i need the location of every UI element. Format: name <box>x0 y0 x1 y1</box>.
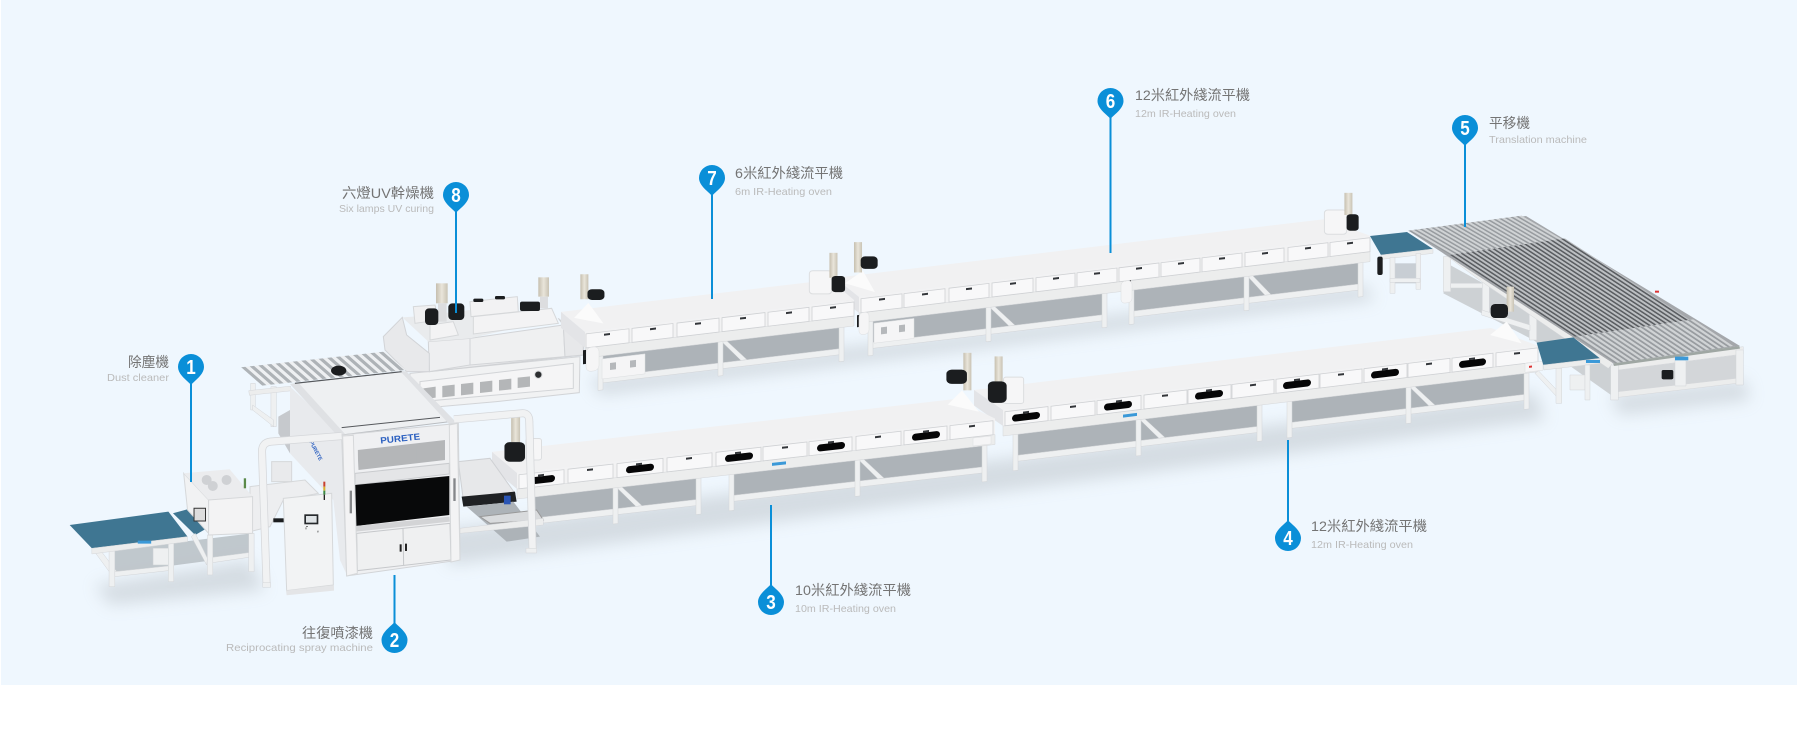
pin 4 <box>1275 440 1301 551</box>
callout 5: translation machine <box>1452 115 1587 227</box>
sublabel: Translation machine <box>1489 134 1587 146</box>
callout 3: 10m oven <box>758 505 911 615</box>
pipe arches <box>262 436 342 587</box>
pin 8: 8 <box>451 185 461 207</box>
callout 7: 6m oven <box>699 165 843 299</box>
callout 1: dust cleaner <box>107 354 204 482</box>
pin 4: 4 <box>1283 528 1293 550</box>
exhaust fans on upper ovens <box>574 242 878 324</box>
transfer table right <box>458 458 543 542</box>
label: 10米紅外綫流平機 <box>795 582 911 598</box>
callout 2: spray machine <box>226 575 408 654</box>
label: 6米紅外綫流平機 <box>735 165 843 181</box>
table bed <box>1408 216 1740 363</box>
dust cleaner <box>184 469 253 535</box>
sublabel: 10m IR-Heating oven <box>795 603 896 615</box>
pin 7: 7 <box>707 168 717 190</box>
label: 往復噴漆機 <box>302 625 373 641</box>
machine: translation roller table <box>1408 216 1743 400</box>
pin 2 <box>382 575 408 653</box>
label: 12米紅外綫流平機 <box>1311 518 1427 534</box>
side logo: PURETE <box>308 440 323 462</box>
sublabel: 6m IR-Heating oven <box>735 186 832 198</box>
label: 平移機 <box>1489 115 1530 131</box>
machine: reciprocating spray booth <box>262 371 543 595</box>
control cabinet <box>283 482 334 595</box>
sublabel: Six lamps UV curing <box>339 203 434 215</box>
drawers <box>519 421 993 489</box>
machine: 6m IR-heating oven <box>561 277 854 395</box>
pin 7 <box>699 165 725 299</box>
sublabel: Dust cleaner <box>107 372 170 384</box>
drawers <box>861 238 1370 313</box>
callout 4: 12m oven lower <box>1275 440 1427 551</box>
machine: 12m IR-heating oven lower <box>974 322 1543 475</box>
label: 除塵機 <box>128 354 169 370</box>
cabinet doors <box>357 523 451 571</box>
conveyor: blue upper <box>1370 232 1433 293</box>
pin 1: 1 <box>186 357 196 379</box>
callout 8: UV curing <box>339 182 469 313</box>
exhaust fans on lower ovens <box>504 353 1024 462</box>
pin 2: 2 <box>390 630 399 652</box>
table between dust cleaner and spray booth <box>250 462 318 532</box>
pin 6: 6 <box>1106 91 1115 113</box>
pin 6 <box>1098 88 1124 253</box>
drawers <box>586 302 854 348</box>
grilles <box>423 376 530 399</box>
machine: 12m IR-heating oven upper <box>835 214 1370 360</box>
machine: 10m IR-heating oven <box>492 395 995 538</box>
grille <box>358 440 445 470</box>
conveyor: blue infeed <box>70 469 254 587</box>
pin 5: 5 <box>1460 118 1470 140</box>
rollers: middle zone <box>1450 238 1690 337</box>
callout 6: 12m oven upper <box>1098 87 1250 253</box>
conveyor: blue lower <box>1490 287 1600 403</box>
pin 3: 3 <box>766 592 776 614</box>
machine: UV curing <box>383 277 583 407</box>
pin 3 <box>758 505 784 615</box>
spray window <box>355 476 449 526</box>
drawers <box>1005 348 1538 426</box>
floor shadows <box>95 285 1750 605</box>
rollers: upper zone <box>1408 216 1563 255</box>
rollers <box>241 352 406 386</box>
sublabel: 12m IR-Heating oven <box>1135 108 1236 120</box>
conveyor: roller infeed <box>241 352 406 427</box>
sublabel: 12m IR-Heating oven <box>1311 539 1413 551</box>
sublabel: Reciprocating spray machine <box>226 642 373 654</box>
label: 12米紅外綫流平機 <box>1135 87 1250 103</box>
rollers: lower zone <box>1575 319 1733 363</box>
fans <box>425 296 540 325</box>
side wall <box>290 387 347 576</box>
logo: PURETE <box>380 432 421 446</box>
label: 六燈UV幹燥機 <box>342 185 434 201</box>
